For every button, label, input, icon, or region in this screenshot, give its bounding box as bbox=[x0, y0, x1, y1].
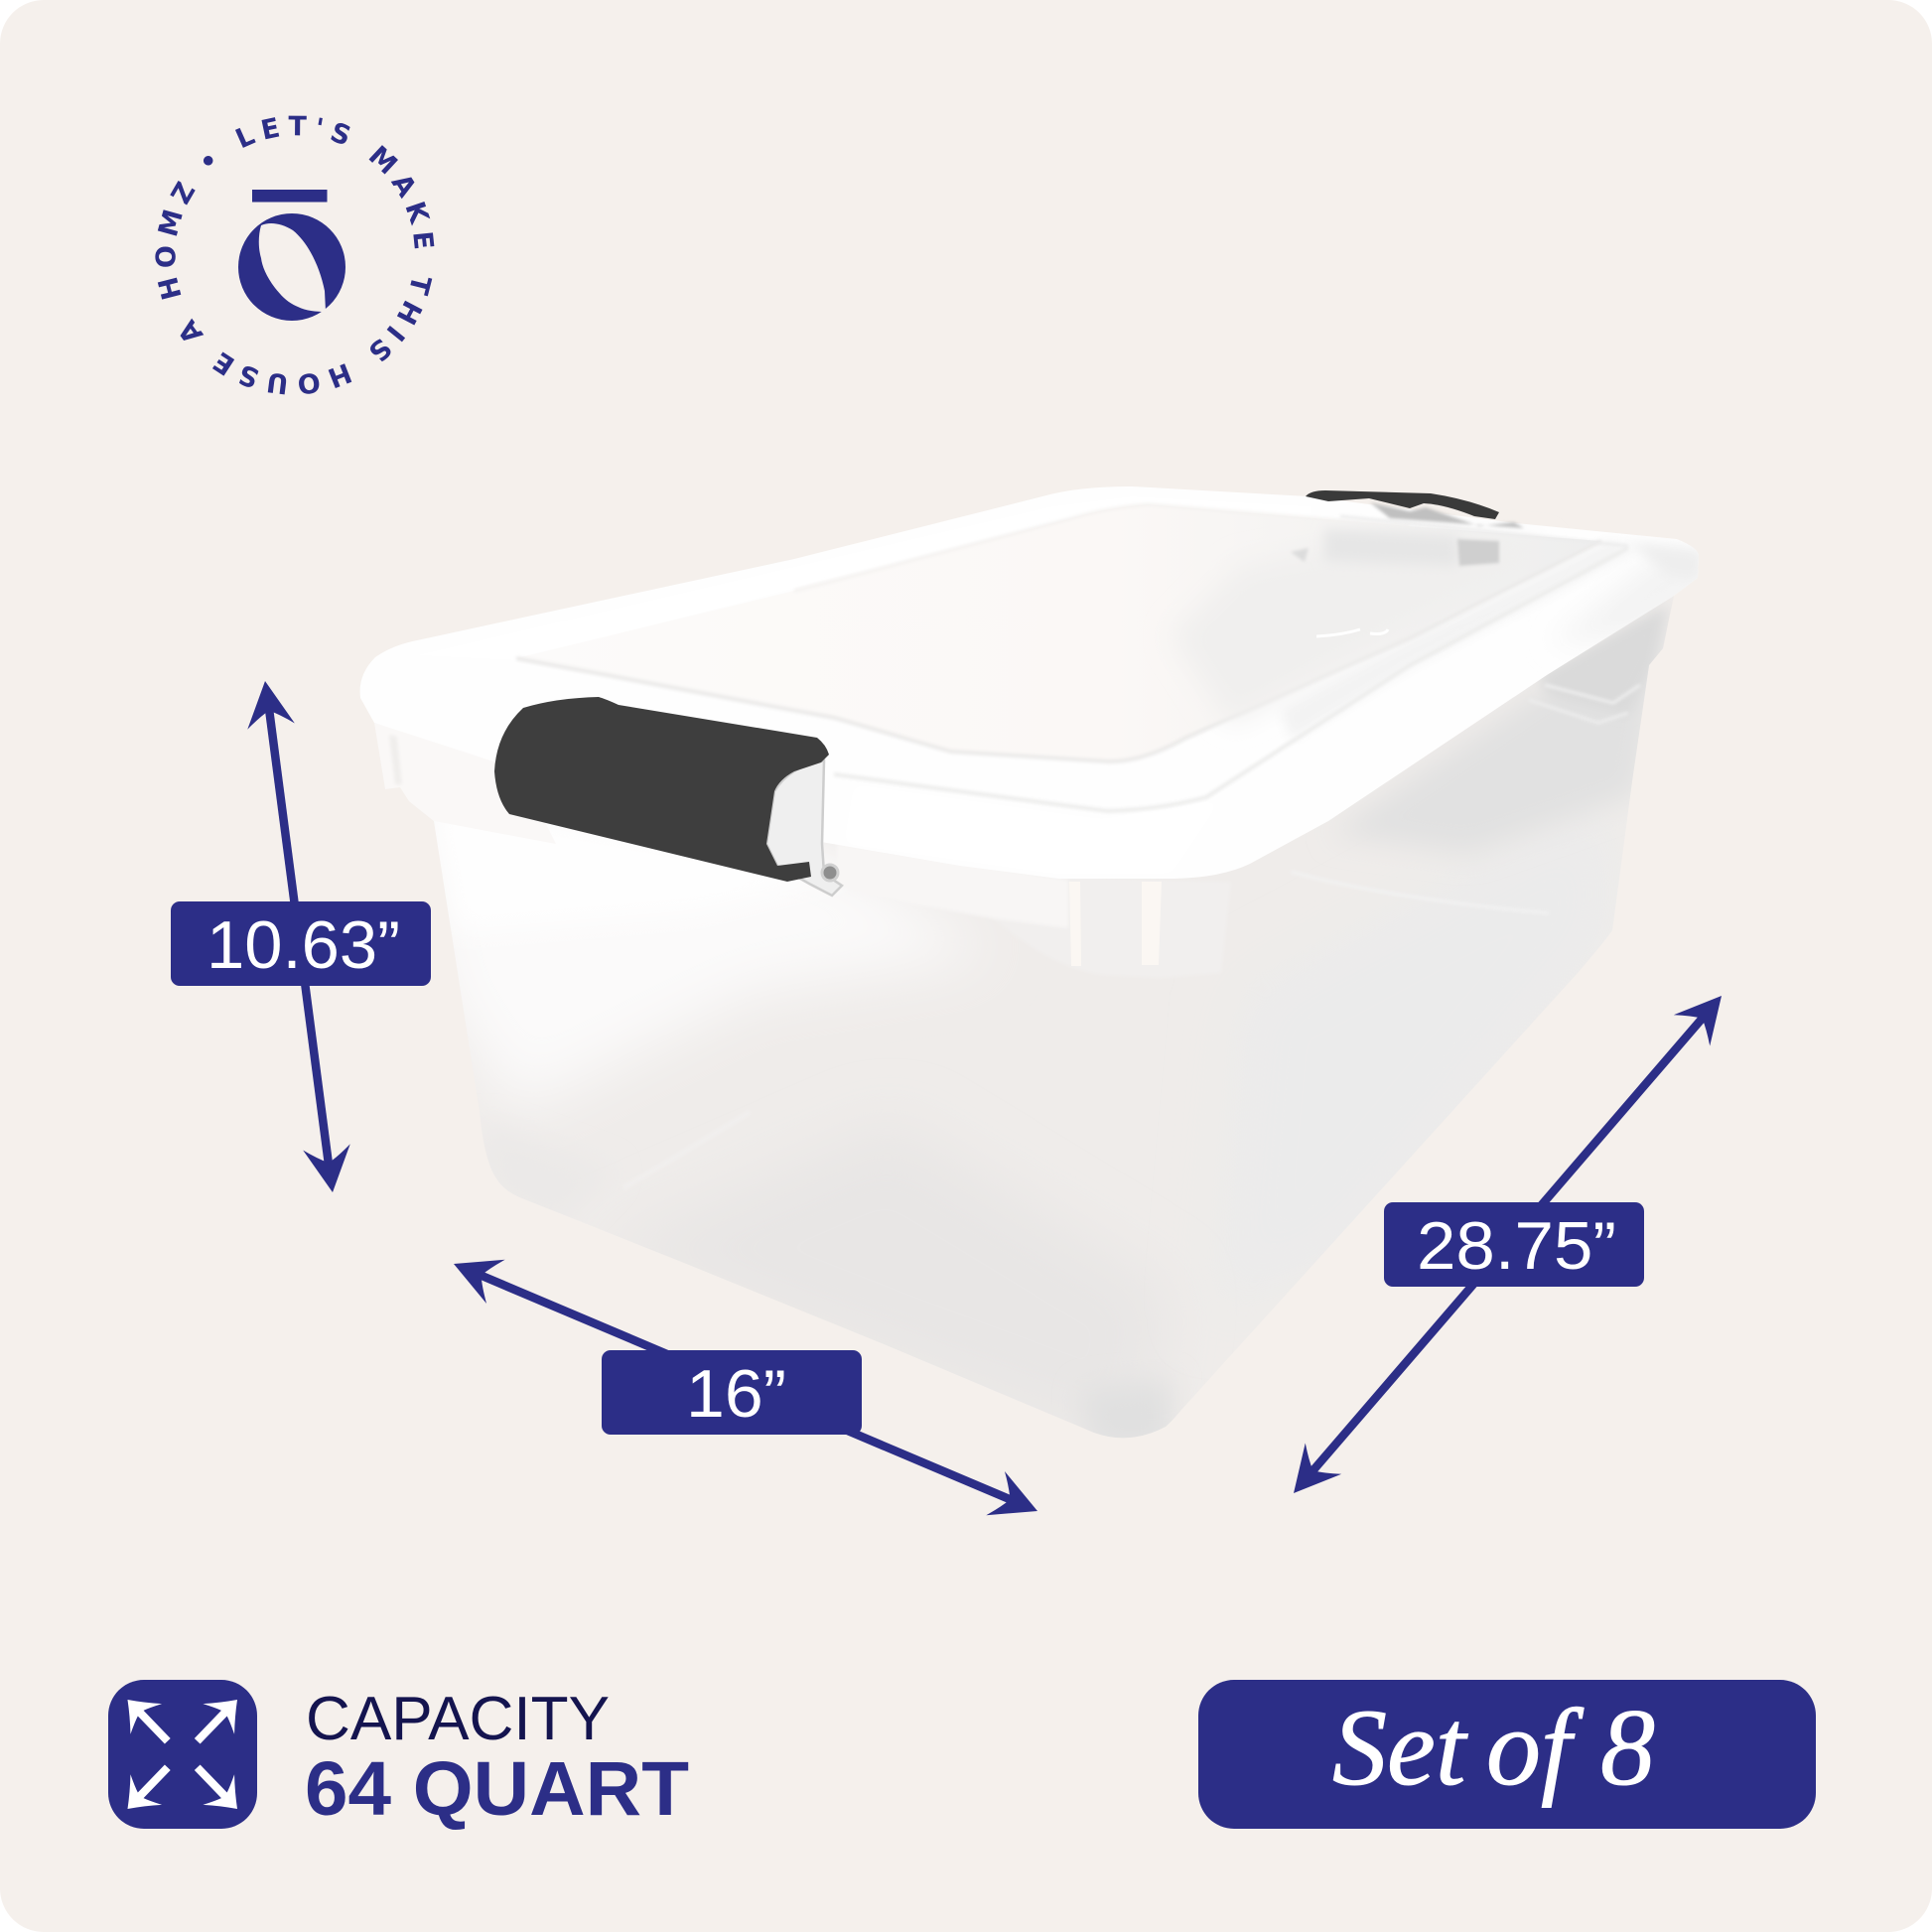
label: height 10.63 bbox=[171, 901, 431, 986]
hinge pin bbox=[822, 865, 838, 881]
front ribs bbox=[1069, 882, 1162, 966]
logo macron bar bbox=[252, 190, 328, 203]
label: height 10.63: 10.63” bbox=[207, 907, 400, 983]
label: depth 28.75: 28.75” bbox=[1417, 1208, 1616, 1284]
pale rim top bbox=[417, 496, 1311, 660]
lid panel reflections bbox=[1172, 536, 1549, 725]
front latch handle bbox=[494, 697, 842, 896]
flange left bbox=[374, 723, 556, 844]
right side shade bbox=[1211, 794, 1618, 1320]
label: width 16: 16” bbox=[686, 1356, 786, 1432]
rim front lower bbox=[844, 784, 1221, 874]
set of 8 badge bbox=[1198, 1680, 1816, 1829]
capacity heading: CAPACITY bbox=[306, 1685, 610, 1753]
capacity text bbox=[305, 1685, 689, 1832]
black handle grip bbox=[494, 697, 829, 882]
highlights bbox=[1291, 872, 1549, 913]
dimension arrow: depth bbox=[1276, 980, 1739, 1509]
logo letter O bbox=[238, 213, 345, 321]
lid groove bbox=[834, 548, 1628, 811]
capacity value: 64 QUART bbox=[305, 1746, 689, 1832]
logo badge bbox=[155, 115, 435, 395]
label: width 16 bbox=[602, 1350, 862, 1435]
lid inner panel bbox=[516, 504, 1601, 761]
pale body below latch bbox=[427, 794, 854, 933]
icon: capacity expand arrows bbox=[108, 1680, 257, 1829]
box body bbox=[374, 596, 1674, 1459]
label: depth 28.75 bbox=[1384, 1202, 1644, 1287]
box lid bbox=[360, 486, 1708, 879]
set of 8 badge: Set bbox=[1332, 1687, 1468, 1808]
clear latch hinge bbox=[766, 760, 842, 896]
storage box photo bbox=[360, 486, 1708, 1459]
lower floor shade bbox=[596, 1122, 1172, 1459]
logo ring text: • LET'S MAKE THIS HOUSE A HOMZ bbox=[155, 115, 435, 395]
set of 8 badge: 8 bbox=[1600, 1687, 1655, 1808]
dimension arrow: height bbox=[241, 678, 356, 1195]
rim shading right bbox=[1288, 548, 1616, 731]
white upper left bbox=[449, 886, 937, 1093]
flange front bbox=[837, 844, 1068, 928]
dimension arrow: width bbox=[445, 1242, 1046, 1533]
set of 8 badge: of bbox=[1486, 1687, 1585, 1808]
back latch handle bbox=[1306, 490, 1524, 528]
shelf shadow shape bbox=[993, 874, 1231, 978]
